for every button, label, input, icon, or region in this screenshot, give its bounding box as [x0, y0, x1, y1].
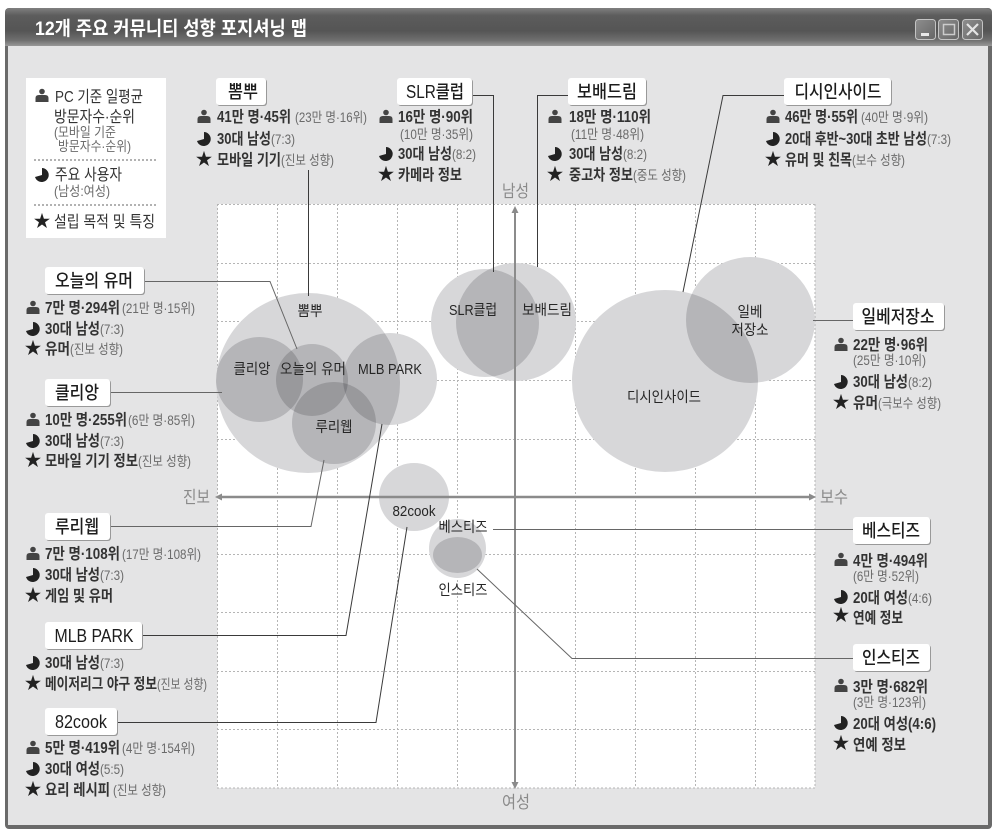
callout: 루리웹: 루리웹 — [55, 517, 99, 537]
callout: 보배드림: (중도 성향) — [633, 168, 686, 183]
bubble: 루리웹 — [292, 382, 376, 464]
callout: 보배드림 — [546, 78, 686, 184]
bubble: MLB PARK — [343, 333, 437, 425]
callout: 베스티즈: 연예 정보 — [853, 609, 903, 627]
callout: 보배드림: 중고차 정보 — [569, 166, 633, 184]
callout: 디시인사이드: (7:3) — [927, 132, 951, 147]
callout: 뽐뿌: 뽐뿌 — [228, 82, 258, 102]
bubble labels: 오늘의 유머 — [280, 361, 346, 378]
callout: 뽐뿌: 모바일 기기 — [217, 151, 281, 169]
callout: 오늘의 유머: (21만 명·15위) — [122, 301, 195, 316]
callout: 베스티즈: (4:6) — [908, 591, 932, 606]
callout: SLR클럽: ★ — [378, 165, 394, 184]
legend panel: 방문자수·순위 — [54, 108, 135, 126]
callout: 뽐뿌: 41만 명·45위 — [217, 108, 291, 126]
callout: SLR클럽: SLR클럽 — [406, 82, 464, 102]
callout: MLB PARK: MLB PARK — [54, 626, 134, 646]
callout: 디시인사이드: (40만 명·9위) — [861, 110, 928, 125]
callout: 클리앙: 30대 남성 — [45, 432, 100, 450]
bubble: SLR클럽 — [431, 269, 539, 377]
callout: 보배드림: 30대 남성 — [569, 145, 623, 163]
axis labels: 진보 — [183, 488, 210, 507]
callout: 보배드림: 18만 명·110위 — [569, 108, 651, 126]
callout: 베스티즈: (6만 명·52위) — [853, 569, 919, 584]
bubble labels — [234, 302, 768, 599]
bubble labels: SLR클럽 — [449, 302, 497, 319]
bubble labels: 클리앙 — [234, 361, 270, 378]
callout: 루리웹: (17만 명·108위) — [122, 547, 201, 562]
legend panel: (남성:여성) — [54, 184, 110, 199]
callout: 82cook: 82cook — [55, 712, 108, 732]
callout: 오늘의 유머: 7만 명·294위 — [45, 299, 120, 317]
callout: 오늘의 유머: 30대 남성 — [45, 320, 100, 338]
callout: 베스티즈: 20대 여성 — [853, 589, 908, 607]
callout: 일베저장소: (8:2) — [908, 375, 932, 390]
callout: 일베저장소: (극보수 성향) — [878, 396, 941, 411]
bubble: 뽐뿌 — [216, 293, 400, 473]
callout: 베스티즈: 베스티즈 — [862, 521, 920, 541]
callout: 인스티즈: 3만 명·682위 — [853, 678, 928, 696]
callout: MLB PARK: ★ — [24, 674, 42, 693]
callout: 디시인사이드: ★ — [764, 150, 782, 169]
callout: MLB PARK: 메이저리그 야구 정보 — [45, 675, 157, 693]
bubble labels: 베스티즈 — [438, 519, 488, 536]
callout: 루리웹: 30대 남성 — [45, 566, 100, 584]
callout: 베스티즈 — [832, 517, 932, 627]
axis labels: 보수 — [820, 488, 848, 507]
bubbles — [216, 257, 815, 578]
callout: SLR클럽: 30대 남성 — [398, 145, 452, 163]
callout: 일베저장소: ★ — [832, 393, 850, 412]
callout: 클리앙: ★ — [24, 451, 42, 470]
callout: 베스티즈: ★ — [832, 606, 850, 625]
callout: SLR클럽: (8:2) — [452, 147, 476, 162]
callout: 일베저장소: 일베저장소 — [862, 307, 934, 327]
callout: 인스티즈: (3만 명·123위) — [853, 695, 926, 710]
bubble: 클리앙 — [216, 337, 303, 422]
axis labels — [183, 182, 848, 812]
callout: 클리앙 — [24, 379, 195, 470]
callout: 보배드림: (8:2) — [623, 147, 647, 162]
legend panel: 설립 목적 및 특징 — [54, 213, 155, 231]
callout: 오늘의 유머: 오늘의 유머 — [55, 271, 133, 291]
callout: 82cook: 요리 레시피 — [45, 781, 110, 799]
callout: SLR클럽: 16만 명·90위 — [398, 108, 473, 126]
callout: SLR클럽: (10만 명·35위) — [400, 127, 473, 142]
callout: 베스티즈: 4만 명·494위 — [853, 552, 928, 570]
bubble: 오늘의 유머 — [276, 344, 348, 416]
callout: 루리웹: 7만 명·108위 — [45, 545, 120, 563]
bubble labels: MLB PARK — [358, 362, 422, 378]
bubble labels: 인스티즈 — [438, 582, 488, 599]
callout: 루리웹: (7:3) — [100, 568, 124, 583]
legend panel: (모바일 기준 — [54, 125, 116, 140]
callout: 82cook: 30대 여성 — [45, 760, 100, 778]
callout: 82cook: (4만 명·154위) — [122, 741, 195, 756]
callout: 오늘의 유머: (7:3) — [100, 322, 124, 337]
callout: SLR클럽 — [378, 78, 476, 184]
callout: MLB PARK — [24, 622, 207, 693]
callout: 일베저장소 — [832, 303, 945, 412]
legend panel: PC 기준 일평균 — [55, 88, 143, 106]
bubble: 인스티즈 — [433, 537, 482, 573]
callout: 인스티즈 — [832, 644, 936, 754]
bubble: 베스티즈 — [429, 519, 486, 578]
callout: 보배드림: ★ — [546, 165, 564, 184]
callout: 82cook: ★ — [24, 780, 42, 799]
callout: 디시인사이드 — [764, 78, 951, 169]
callout: 오늘의 유머: ★ — [24, 339, 42, 358]
callout: 클리앙: (7:3) — [100, 434, 124, 449]
callout: 오늘의 유머: 유머 — [45, 340, 70, 358]
axis labels: 남성 — [502, 182, 529, 201]
bubble: 보배드림 — [456, 263, 576, 381]
callout: 디시인사이드: 20대 후반~30대 초반 남성 — [785, 130, 927, 148]
bubble labels: 저장소 — [732, 322, 768, 339]
bubble labels: 일베 — [738, 304, 762, 321]
callout: 클리앙: 모바일 기기 정보 — [45, 452, 138, 470]
positioning chart — [183, 182, 848, 812]
callout: 인스티즈: ★ — [832, 734, 850, 753]
callout: 디시인사이드: 46만 명·55위 — [785, 108, 858, 126]
callout: 디시인사이드: (보수 성향) — [852, 153, 905, 168]
callout: MLB PARK: (7:3) — [100, 656, 124, 671]
callout: 82cook: (5:5) — [100, 762, 124, 777]
callout: 디시인사이드: 유머 및 친목 — [785, 151, 852, 169]
bubble labels: 보배드림 — [522, 302, 572, 319]
callout: 인스티즈: 인스티즈 — [862, 648, 920, 668]
bubble: 82cook — [379, 463, 449, 531]
title: 12개 주요 커뮤니티 성향 포지셔닝 맵 — [35, 18, 307, 40]
callout: 클리앙: (진보 성향) — [138, 454, 191, 469]
bubble: 디시인사이드 — [572, 290, 758, 472]
callout: 오늘의 유머: (진보 성향) — [70, 342, 123, 357]
horizontal axis — [215, 494, 816, 500]
callout: 뽐뿌: (23만 명·16위) — [295, 110, 367, 125]
chart grid — [217, 204, 815, 788]
legend panel: 주요 사용자 — [55, 166, 122, 184]
callout: 보배드림: (11만 명·48위) — [571, 127, 644, 142]
callout: 클리앙: (6만 명·85위) — [128, 413, 195, 428]
callout: SLR클럽: 카메라 정보 — [398, 166, 462, 184]
callout: 일베저장소: 30대 남성 — [853, 373, 908, 391]
callout: 82cook — [24, 708, 195, 799]
callout: 일베저장소: (25만 명·10위) — [853, 353, 926, 368]
bubble labels: 디시인사이드 — [627, 389, 701, 406]
callout: 루리웹: ★ — [24, 586, 42, 605]
callout: MLB PARK: (진보 성향) — [157, 677, 207, 692]
callout: 오늘의 유머 — [24, 267, 195, 358]
callout: 인스티즈: 20대 여성(4:6) — [853, 715, 936, 733]
callout: 루리웹: 게임 및 유머 — [45, 587, 113, 605]
callout: 뽐뿌: (7:3) — [271, 132, 295, 147]
callout: 뽐뿌 — [196, 78, 367, 169]
callout: 디시인사이드: 디시인사이드 — [794, 82, 882, 102]
callout: 82cook: (진보 성향) — [113, 783, 166, 798]
bubble labels: 뽐뿌 — [298, 303, 322, 320]
callout: 클리앙: 클리앙 — [55, 383, 99, 403]
bubble labels: 82cook — [392, 504, 436, 520]
callout: 뽐뿌: ★ — [196, 150, 212, 169]
vertical axis — [512, 206, 518, 789]
callout: 보배드림: 보배드림 — [577, 82, 637, 102]
callout: MLB PARK: 30대 남성 — [45, 654, 100, 672]
legend panel — [26, 78, 166, 238]
callout: 루리웹 — [24, 513, 201, 605]
callout: 일베저장소: 유머 — [853, 394, 878, 412]
bubble labels: 루리웹 — [316, 419, 352, 436]
bubble: 일베저장소 — [686, 257, 815, 383]
axis labels: 여성 — [502, 793, 530, 812]
callout: 클리앙: 10만 명·255위 — [45, 411, 127, 429]
legend panel: ★ — [34, 212, 50, 231]
title bar — [5, 8, 992, 46]
callout: 뽐뿌: 30대 남성 — [217, 130, 271, 148]
window buttons — [916, 20, 982, 40]
leader lines — [111, 96, 853, 722]
callout: 82cook: 5만 명·419위 — [45, 739, 120, 757]
callout: 인스티즈: 연예 정보 — [853, 736, 906, 754]
callout: 뽐뿌: (진보 성향) — [281, 153, 334, 168]
legend panel: 방문자수·순위) — [58, 139, 131, 154]
callout: 일베저장소: 22만 명·96위 — [853, 336, 928, 354]
